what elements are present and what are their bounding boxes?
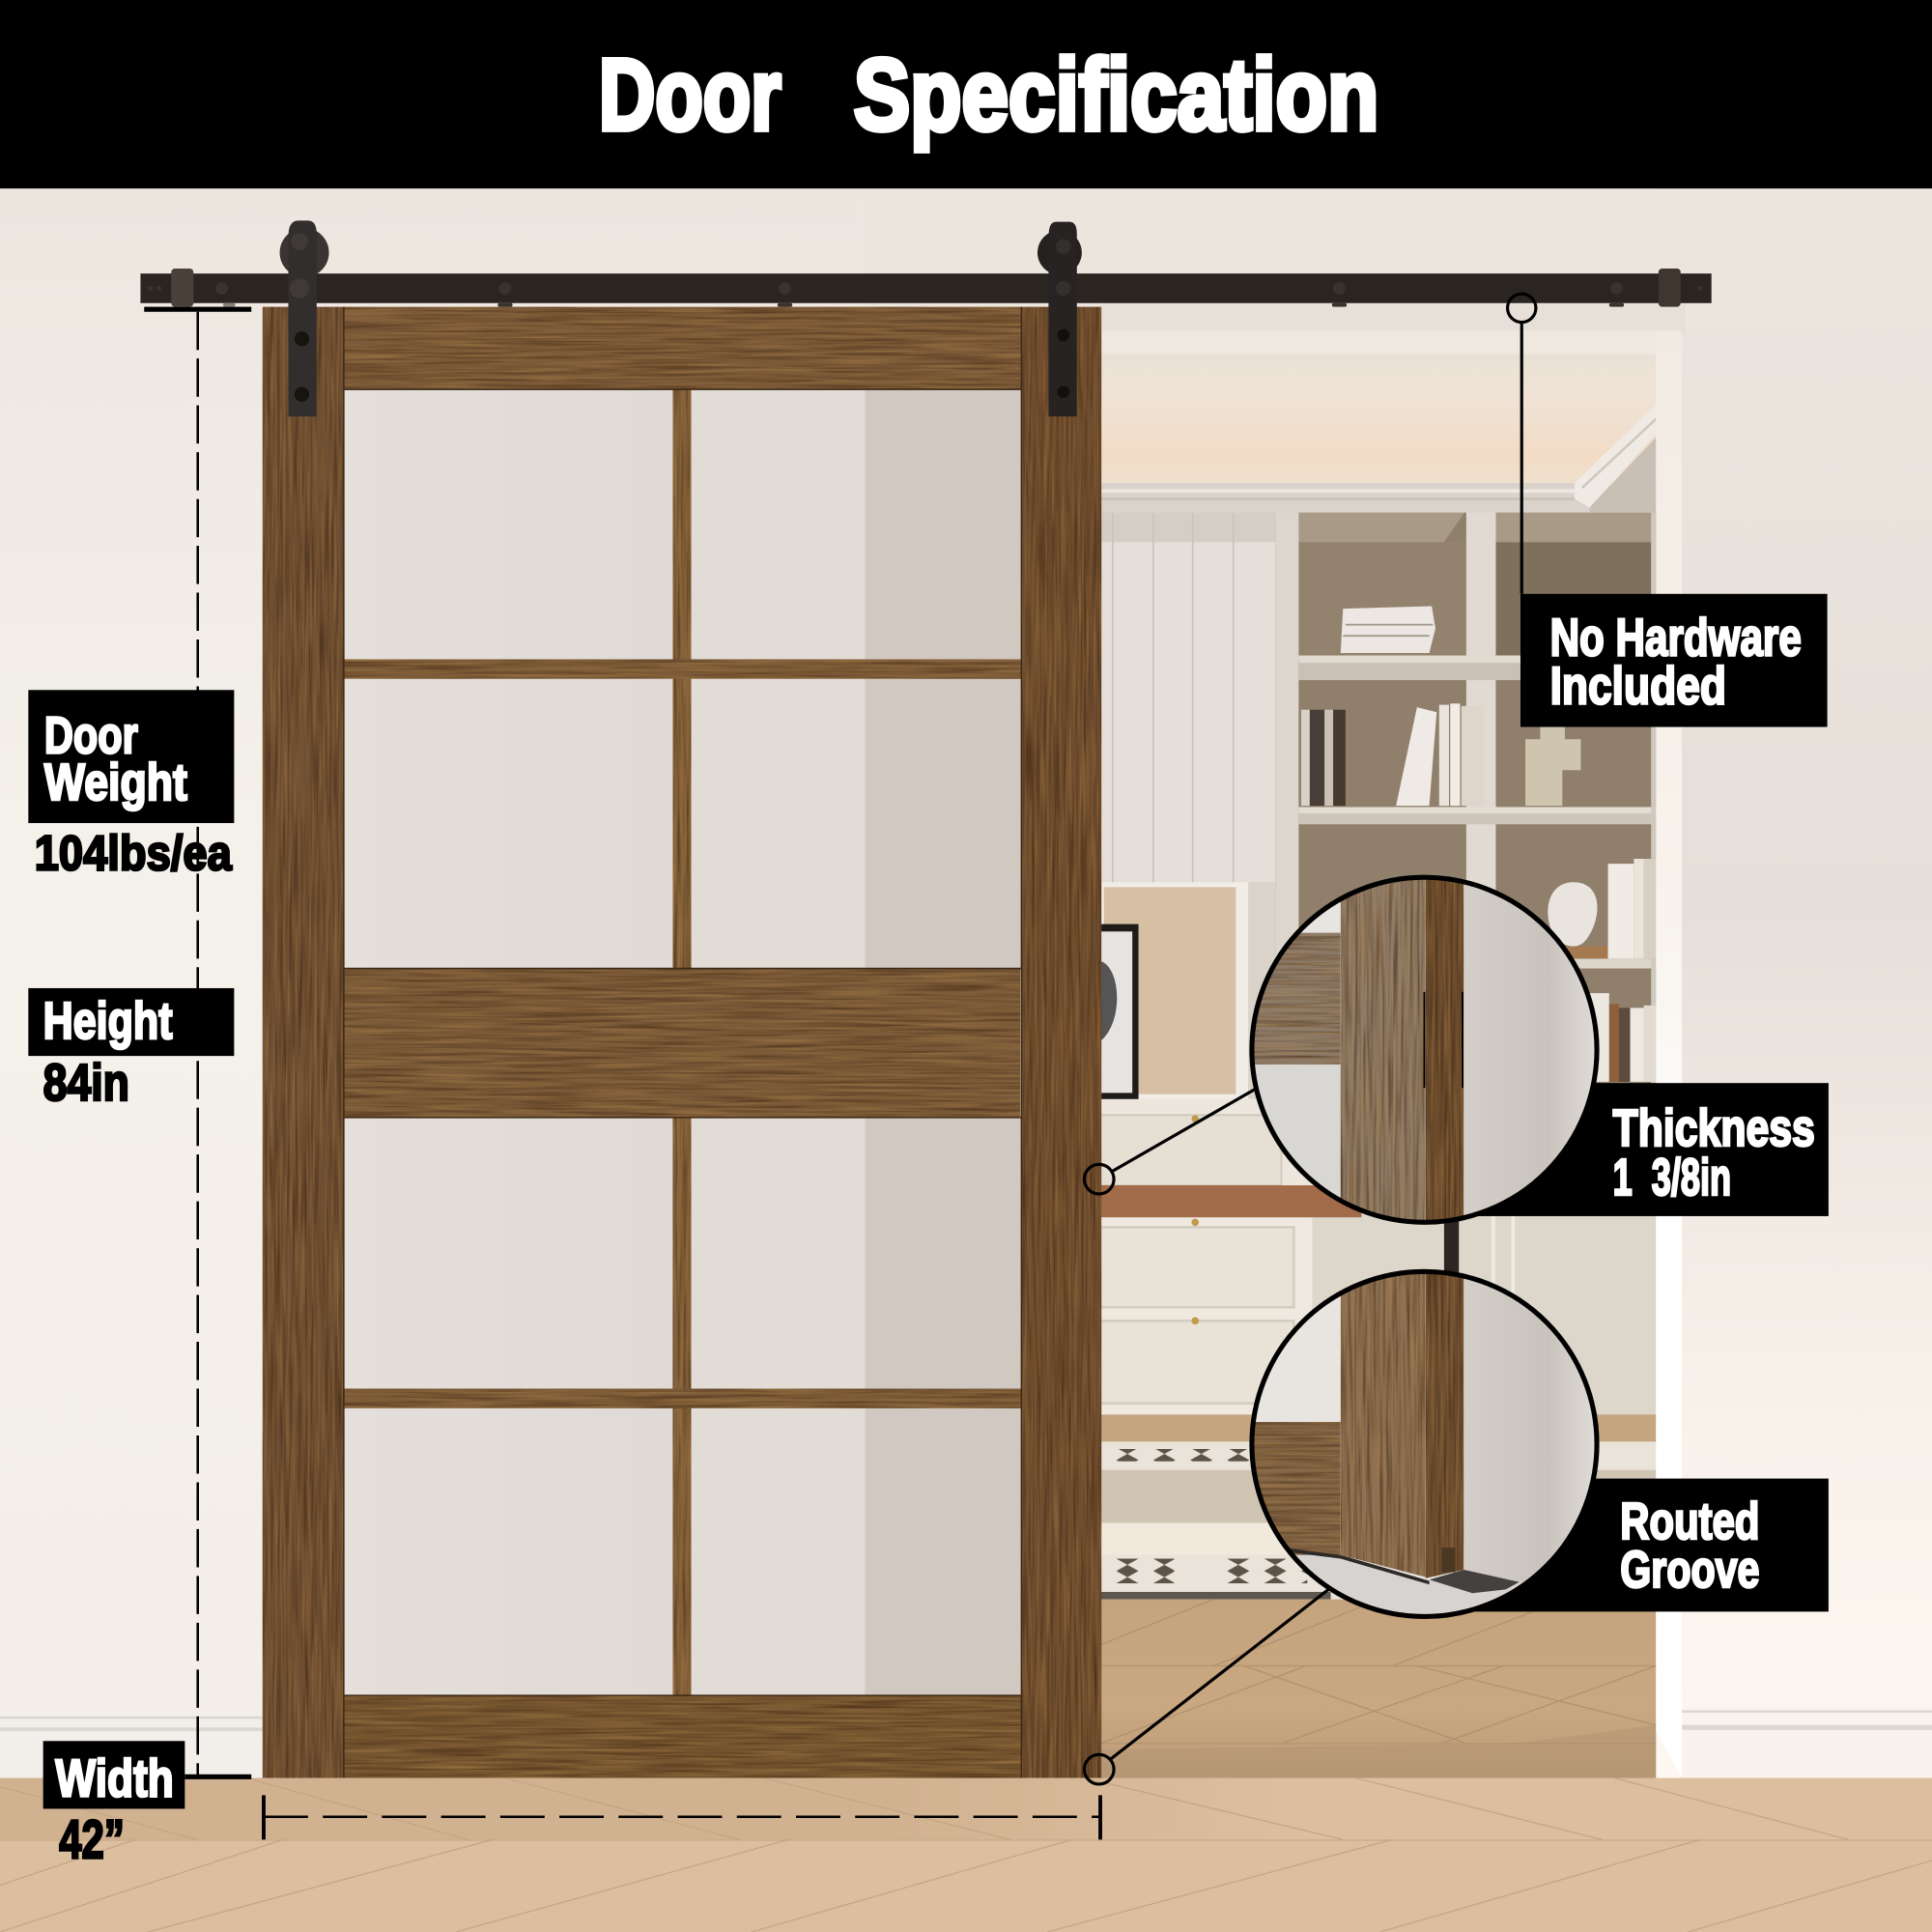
vase and books, right bay bbox=[1548, 859, 1656, 1082]
door weight value: 104lbs/ea bbox=[35, 826, 232, 881]
callout: door weight: Door bbox=[44, 707, 138, 764]
title banner bbox=[0, 0, 1932, 188]
callout: door weight bbox=[28, 690, 234, 823]
magnifier: door thickness detail bbox=[1244, 870, 1605, 1230]
header reveal bbox=[1100, 330, 1682, 354]
desktop bbox=[1100, 1185, 1361, 1217]
end stops bbox=[171, 269, 1681, 307]
interior herringbone floor bbox=[1100, 1600, 1656, 1779]
bookcase bbox=[1275, 510, 1656, 1126]
beadboard wall bbox=[1100, 510, 1288, 1114]
right hanger bbox=[1037, 222, 1082, 416]
width value: 42” bbox=[59, 1808, 125, 1869]
barn door bbox=[263, 307, 1101, 1778]
callout: height bbox=[28, 988, 234, 1056]
art frames bbox=[1100, 882, 1248, 1100]
callout: thickness bbox=[1084, 1083, 1829, 1216]
barn door rail with hardware bbox=[140, 220, 1712, 416]
wall bolts bbox=[148, 282, 1703, 307]
right door jamb bbox=[1656, 332, 1682, 1776]
callout: routed groove bbox=[1084, 1479, 1829, 1784]
callout: routed groove: Groove bbox=[1620, 1542, 1759, 1599]
left stile bbox=[263, 307, 344, 1778]
callout: height: Height bbox=[43, 993, 173, 1050]
interior floor strip bbox=[1100, 1414, 1656, 1444]
rug bbox=[1100, 1441, 1656, 1600]
height dimension line bbox=[144, 309, 251, 1776]
horizontal muntins bbox=[344, 659, 1021, 1408]
main floor bbox=[0, 1778, 1932, 1932]
title word: Door: Door bbox=[599, 39, 781, 152]
right stile bbox=[1021, 307, 1101, 1778]
doorway interior room bbox=[1100, 330, 1682, 1779]
ceiling bbox=[1100, 354, 1656, 483]
callout: thickness: 1 3/8in bbox=[1613, 1150, 1731, 1207]
callout: no hardware included: No Hardware bbox=[1550, 608, 1802, 668]
callout: routed groove: Routed bbox=[1620, 1493, 1759, 1550]
callout: door weight: Weight bbox=[44, 754, 187, 811]
lock rail bbox=[344, 969, 1020, 1118]
left hanger bbox=[280, 220, 329, 416]
vertical muntins bbox=[672, 389, 692, 1696]
track rail bbox=[140, 273, 1712, 303]
baseboards bbox=[0, 1707, 1932, 1779]
thickness marks bbox=[1424, 992, 1463, 1088]
callout: no hardware included bbox=[1508, 294, 1828, 727]
bottom rail bbox=[344, 1695, 1021, 1778]
crown moulding bbox=[1100, 404, 1656, 513]
callout: thickness: Thickness bbox=[1613, 1100, 1815, 1157]
height value: 84in bbox=[43, 1055, 129, 1112]
title word: Specification: Specification bbox=[854, 39, 1378, 152]
lower cabinets bbox=[1100, 1099, 1656, 1423]
books on shelves bbox=[1301, 607, 1580, 806]
magnifier: routed groove detail bbox=[1244, 1264, 1605, 1624]
glass panels bbox=[344, 389, 1021, 1698]
callout: width: Width bbox=[55, 1748, 174, 1808]
width dimension line bbox=[264, 1795, 1100, 1839]
top rail bbox=[344, 307, 1021, 389]
callout: no hardware included: Included bbox=[1550, 655, 1726, 715]
